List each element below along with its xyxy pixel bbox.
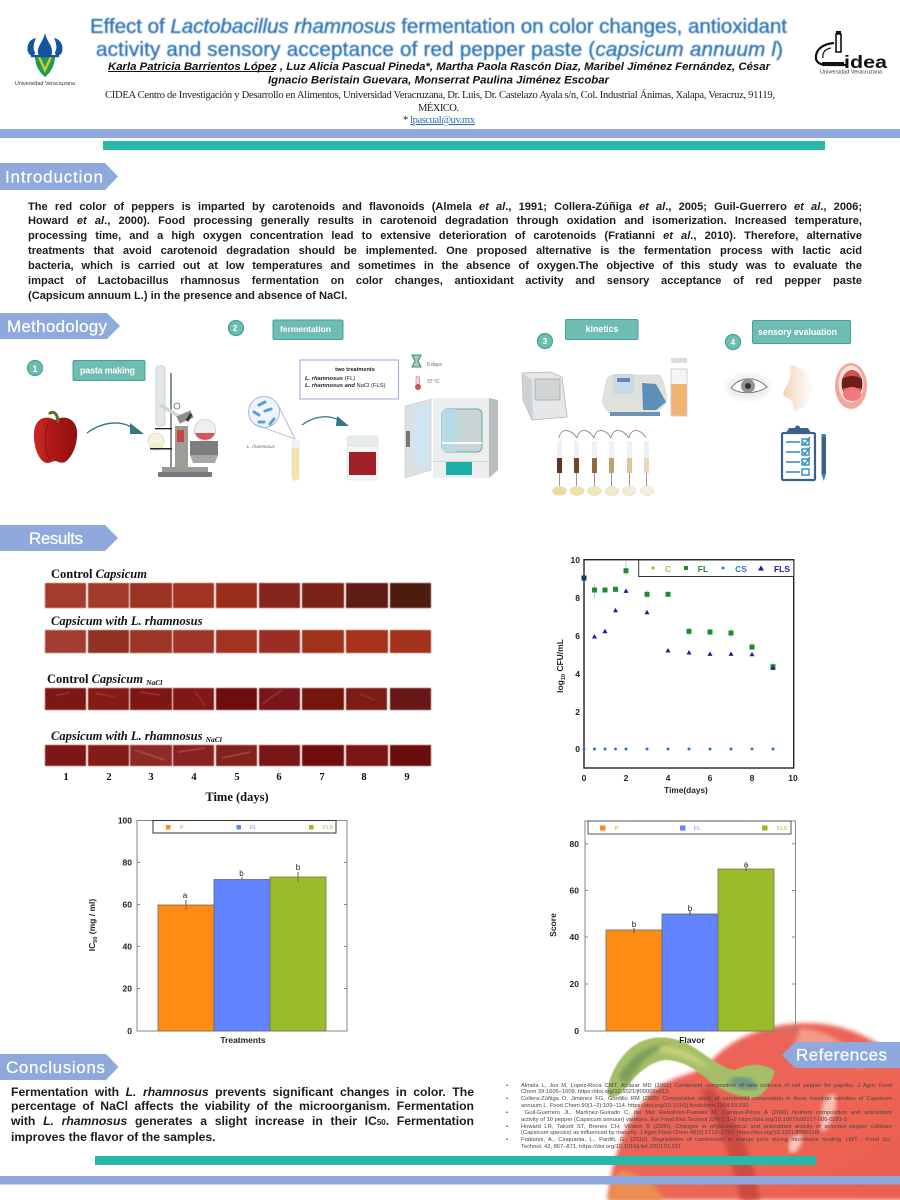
text block: introduction paragraph: The red color of peppers is imparted by carotenoids and flavonoids (Almela et al., 1991; Collera-Zúñiga et al., 2005; Guil-Guerrero et al., 2006; [28,200,862,212]
error bars and letters: b [632,920,637,929]
series: CS [582,748,774,750]
text block: references list: Howard LR, Talcott ST, Brenes CH, Villalon B (2000). Changes in phytochemical and antioxidant activity of selected pepper cultivars [521,1124,892,1130]
day numbers: 5 [234,772,240,783]
legend: FL [698,564,708,574]
row label: Control Capsicum NaCl: NaCl [145,678,163,687]
heading: Results: Results [29,529,83,548]
text block: references list: activity of 10 pepper (Capsicum annuun) varieties. Eur Food Res Technol 224(1):1–9 https://doi.org/10.1007/s00217-006-0281-5 [521,1117,847,1123]
chart: viability log10 CFU/mL over time: 8 [750,773,755,783]
header bar: teal [103,141,825,150]
background: red pepper illustration [607,1023,900,1200]
axis label: IC50: 50 [93,937,99,943]
logo: CIDEA: idea [844,52,887,72]
step 3 badge: 3 [543,337,548,346]
y axis labels: 80 [123,858,132,868]
y axis labels: 20 [570,979,579,989]
text box: two treatments: two treatments [335,367,375,373]
text block: introduction paragraph: processing time, and a high oxygen concentration lead to extensive deterioration of carotenoids (Fratianni et al., 2010). Therefore, alternative [28,230,862,242]
icon: rotary evaporator [148,366,218,477]
day numbers: 9 [404,772,410,783]
chart: viability log10 CFU/mL over time: 10 [788,773,798,783]
icon: hourglass, 9 days: 9 days [427,362,442,368]
icon: jar of pepper paste [347,436,378,480]
arrow: tube to jar [302,416,349,426]
title [90,15,787,61]
text block: references list [506,1082,892,1150]
step 1 badge: 1 [32,364,38,374]
chart: flavor score [548,821,796,1045]
legend: FLS [777,826,787,832]
step 3 label: kinetics [566,320,638,340]
step 1 label: pasta making: pasta making [80,366,135,376]
chart: IC50 by treatment [87,816,347,1045]
y axis labels: 60 [570,886,579,896]
axis label: Score: Score [548,913,558,937]
error bars and letters [183,863,301,910]
legend: P [615,826,619,832]
axis label: Treatments: Treatments [220,1035,266,1045]
chart: viability log10 CFU/mL over time: 8 [575,593,580,603]
text: • [506,1096,508,1102]
error bars and letters: a [744,860,749,869]
text block: references list: Fratianni, A., Cinquanta, L., Panfili, G., (2010). Degradation of carotenoids in orange juice during microwave heating. LWT - Food Sci. [521,1137,892,1143]
axis label: Flavor: Flavor [679,1035,705,1045]
affiliation: MÉXICO. [418,102,459,114]
legend: FLS [323,825,333,831]
text box: two treatments [300,360,398,399]
figure: color strips over time [45,567,431,804]
legend: C [665,564,671,574]
text block: conclusions paragraph [11,1085,474,1144]
text block: conclusions paragraph: with L. rhamnosus generates a slight increase in their IC50. Fermentation [11,1114,474,1128]
text block: references list: Chem 39:1606–1609. https://doi.org/10.1021/jf00009a013 [521,1089,668,1095]
step 2 badge [228,320,244,336]
step 3 badge [538,334,552,348]
chart: viability log10 CFU/mL over time: 0 [582,773,587,783]
footer bar: blue [0,1176,900,1184]
text block: introduction paragraph: bacteria, which is carried out at low temperatures and sometimes in the absence of oxygen.The objective of this study was to evaluate the [28,260,862,272]
step 4 badge [726,334,740,350]
chart: viability log10 CFU/mL over time: 6 [575,631,580,641]
step 4 label: sensory evaluation [752,320,850,344]
text block: references list: Technol. 43, 867–871. https://doi.org/10.1016/j.lwt.2010.01.011 [521,1144,681,1150]
bar: FLS [718,869,774,1031]
icon: clipboard checklist and pencil [782,426,826,481]
y axis labels: 40 [123,942,132,952]
text block: introduction paragraph: (Capsicum annuum L.) in the presence and absence of NaCl. [28,290,347,302]
day numbers: 4 [191,772,197,783]
y axis labels: 60 [123,900,132,910]
text block: references list: Collera-Zúñiga O, Jiménez FG, Gordillo RM (2005) Comparative study of carotenoid composition in three mexican varieties of Capsicum [521,1096,892,1102]
step 3 label: kinetics: kinetics [586,324,618,334]
text block: conclusions paragraph: improves the flavor of the samples. [11,1130,216,1144]
text block: conclusions paragraph: percentage of NaCl affects the viability of the microorganism. Fermentation [11,1099,474,1113]
icon: thermometer, 37 °C [415,376,440,390]
text box: two treatments: L. rhamnosus and NaCl (FLS) [305,383,386,389]
icon: cuvette with sample [671,358,687,416]
row label: Capsicum with L. rhamnosus NaCl: NaCl [205,735,223,744]
legend: CS [735,564,747,574]
text block: references list: (Capsicum species) as influenced by maturity. J Agric Food Chem 48(5):1713–1720. https://doi.org/10.1021/jf990916t [521,1130,819,1136]
text block: conclusions paragraph: Fermentation with L. rhamnosus prevents significant changes in color. The [11,1085,474,1099]
bar: FL [662,914,718,1031]
text block: references list: Almela L, Jos M, Lopez-Roca CMT, Alcázar MD (1991) Carotenoid composition of new cultivars of red pepper for paprika. J Agric Food [521,1082,892,1088]
legend: FLS [774,564,790,574]
affiliation: CIDEA Centro de Investigación y Desarrollo en Alimentos, Universidad Veracruzana, Dr. Luis, Dr. Castelazo Ayala s/n, Col. Industrial Ánimas, Xalapa, Veracruz, 91119, [105,89,775,101]
error bars and letters: b [296,863,301,872]
text: • [506,1110,508,1116]
icon: serial dilution tubes and petri dishes [552,430,654,496]
logo: Universidad Veracruzana: Universidad Veracruzana [15,81,75,87]
text: • [506,1137,508,1143]
error bars and letters: a [183,891,188,900]
chart: viability log10 CFU/mL over time: 2 [575,707,580,717]
text block: introduction paragraph: Howard et al., 2000). Food processing generally results in carotenoid degradation through oxidation and isomerization. Increased temperature, [28,215,862,227]
bar: FL [214,880,270,1031]
legend: P [180,825,184,831]
heading: Methodology [0,313,120,339]
series: FL [592,568,776,669]
axis label: IC50: IC [87,943,97,951]
affiliation: * lpascual@uv.mx [403,115,476,126]
footer bar: teal [95,1156,816,1165]
text block: references list: Guil-Guerrero JL, Martínez-Guirado C, del Mar Rebolloso-Fuentes M, Carrique-Pérez A (2006) Nutrient composition and antioxidant [525,1110,892,1116]
row label: Control Capsicum NaCl: Control Capsicum [47,672,143,686]
legend: FL [250,825,256,831]
day numbers: 7 [319,772,325,783]
chart: viability log10 CFU/mL over time: 2 [624,773,629,783]
step 2 label: fermentation: fermentation [280,324,331,334]
y axis labels: 100 [118,816,132,826]
icon: open mouth [835,363,867,409]
axis label: Time (days): Time (days) [205,790,269,804]
legend: FL [694,826,700,832]
icon: L. rhamnosus culture tube with magnifier [247,396,299,481]
y axis labels: 0 [127,1026,132,1036]
strip row: Capsicum with L. rhamnosus NaCl [45,745,431,766]
step 1 label: pasta making [73,360,145,380]
step 2 badge: 2 [233,324,238,333]
strip row: Capsicum with L. rhamnosus [45,630,431,653]
step 4 badge: 4 [731,338,736,347]
logo: CIDEA [816,31,887,76]
icon: L. rhamnosus culture tube with magnifier: L. rhamnosus [247,444,276,449]
day numbers: 8 [361,772,367,783]
error bars and letters: b [688,904,693,913]
chart: viability log10 CFU/mL over time [555,555,798,795]
text: • [506,1082,508,1088]
axis label: time: Time(days) [664,785,708,795]
axis label: log10 CFU/mL: CFU/mL [555,639,565,674]
chart: viability log10 CFU/mL over time: 0 [575,744,580,754]
step 4 label: sensory evaluation: sensory evaluation [758,327,837,337]
y axis labels [570,839,579,1036]
heading: References: References [796,1046,887,1064]
icon: eye [726,374,770,400]
arrow: pepper to rotavapor [87,423,144,434]
error bars and letters: b [239,869,244,878]
day numbers: 6 [276,772,282,783]
title: activity and sensory acceptance of red pepper paste (capsicum annuum l) [96,38,783,61]
y axis labels [118,816,132,1036]
axis label: log10 CFU/mL: log [555,680,565,693]
error bars and letters [632,860,749,933]
text block: references list: annuum L. Food Chem 90(1–2):109–114. https://doi.org/10.1016/j.foodchem.2004.03.032 [521,1103,748,1109]
step 2 label: fermentation [273,320,343,340]
day numbers: 2 [106,772,112,783]
axis label: IC50: (mg / ml) [87,899,97,937]
icon: spectrophotometer [603,374,667,416]
legend [588,821,791,834]
heading: References [782,1042,900,1068]
heading: Conclusions [0,1054,118,1080]
header bar: blue [0,129,900,138]
authors: Ignacio Beristain Guevara, Monserrat Paulina Jiménez Escobar [268,74,610,86]
heading: Introduction: Introduction [5,168,103,186]
row label: Capsicum with L. rhamnosus NaCl: Capsicum with L. rhamnosus [51,729,202,743]
heading: Results [0,525,118,551]
chart: viability log10 CFU/mL over time: 6 [708,773,713,783]
icon: thermometer, 37 °C: 37 °C [427,379,440,385]
axis label: log10 CFU/mL: 10 [561,674,567,680]
heading: Conclusions: Conclusions [6,1058,105,1077]
strip row: Control Capsicum NaCl [45,688,431,710]
y axis labels: 0 [574,1026,579,1036]
icon: incubator [405,398,498,478]
authors [108,61,771,86]
heading: Methodology: Methodology [7,317,108,336]
chart: viability log10 CFU/mL over time: 4 [666,773,671,783]
text: • [506,1124,508,1130]
y axis labels: 40 [570,932,579,942]
chart: viability log10 CFU/mL over time: 4 [575,669,580,679]
icon: red pepper [34,412,77,463]
day numbers: 1 [63,772,69,783]
title: Effect of Lactobacillus rhamnosus fermentation on color changes, antioxidant [90,15,787,38]
icon: hourglass, 9 days [412,355,442,368]
bar: P [158,905,214,1031]
authors: Karla Patricia Barrientos López , Luz Alicia Pascual Pineda*, Martha Paola Rascón Diaz, Maribel Jiménez Fernández, César [108,61,771,73]
logo: CIDEA: Universidad Veracruzana [820,70,882,76]
bar: P [606,930,662,1031]
legend [153,820,336,833]
chart: viability log10 CFU/mL over time: 10 [571,555,580,565]
strip row: Control Capsicum [45,583,431,608]
error bars [594,561,773,670]
bar: FLS [270,877,326,1031]
y axis labels: 20 [123,984,132,994]
day numbers [63,772,410,783]
legend [639,560,794,576]
text block: introduction paragraph [28,200,862,302]
row label: Capsicum with L. rhamnosus: Capsicum with L. rhamnosus [51,614,203,628]
heading: Introduction [0,163,118,190]
text block: introduction paragraph: treatments that avoid carotenoid degradation should be implemented. One proposed alternative is the fermentation process with lactic acid [28,245,862,257]
step 1 badge [28,360,42,376]
logo: Universidad Veracruzana [15,33,75,87]
affiliation [105,89,775,126]
text box: two treatments: L. rhamnosus (FL) [305,376,355,382]
icon: nose [783,365,812,411]
text block: introduction paragraph: impact of Lactobacillus rhamnosus fermentation on color changes, antioxidant activity and sensory acceptance of red pepper paste [28,275,862,287]
series: FLS [582,576,776,670]
icon: plate reader [522,372,567,420]
y axis labels: 80 [570,839,579,849]
day numbers: 3 [148,772,154,783]
row label: Control Capsicum: Control Capsicum [51,567,147,581]
